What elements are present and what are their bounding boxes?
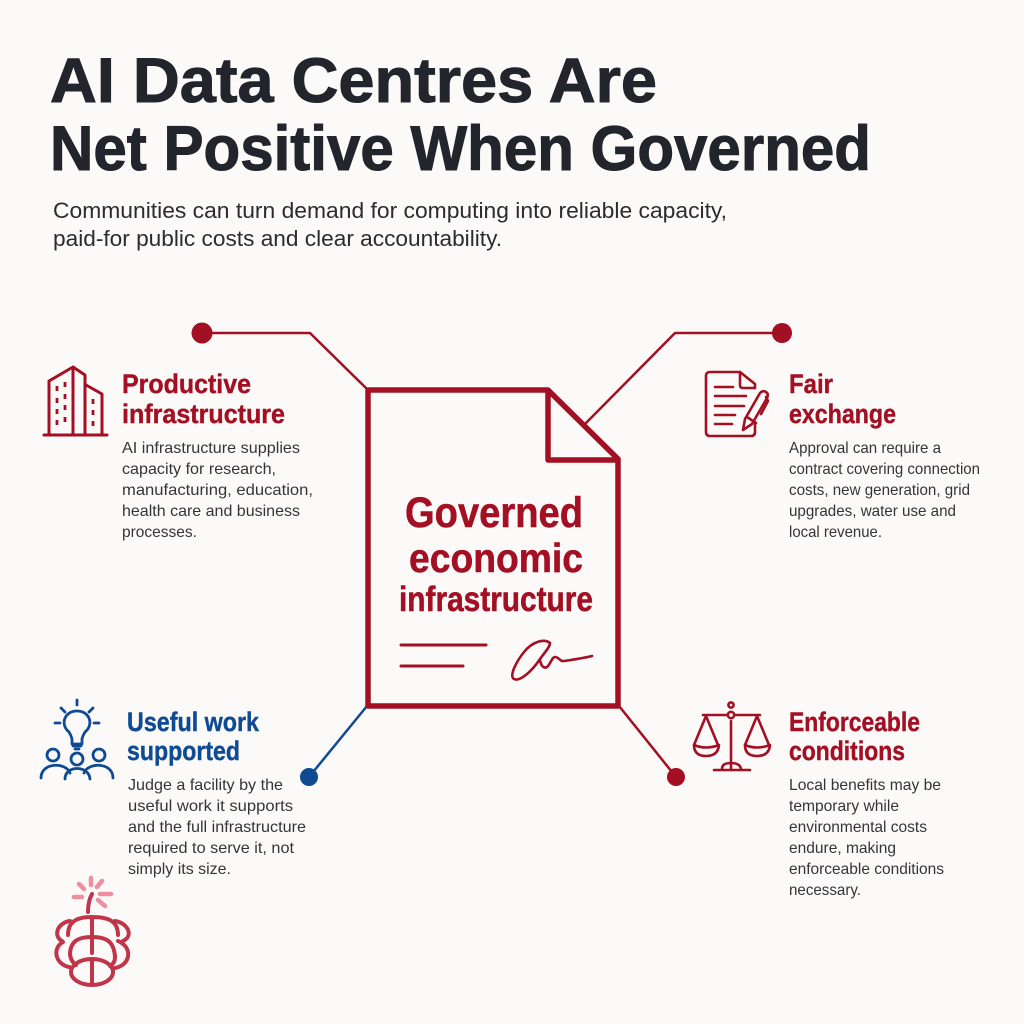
body text: Local benefits may be <box>789 777 941 794</box>
body text: simply its size. <box>128 861 231 878</box>
heading <box>789 707 920 766</box>
body text: Approval can require a <box>789 440 941 457</box>
body text: necessary. <box>789 882 861 899</box>
body text: manufacturing, education, <box>122 482 313 499</box>
heading: conditions <box>789 736 905 766</box>
connector: bottom right <box>619 706 685 786</box>
body text: required to serve it, not <box>128 840 295 857</box>
body text: temporary while <box>789 798 899 815</box>
icon: light bulb and people <box>41 700 113 779</box>
document outline <box>368 390 618 706</box>
body text <box>789 440 980 541</box>
connector: top left <box>192 322 367 389</box>
icon: brain-shaped logo with spark <box>56 878 129 985</box>
body text: endure, making <box>789 840 896 857</box>
icon: contract and pen <box>706 372 768 436</box>
body text: processes. <box>122 524 197 541</box>
heading: Useful work <box>127 707 260 737</box>
document title: economic <box>409 535 583 581</box>
heading: Fair <box>789 369 833 399</box>
body text: useful work it supports <box>128 798 293 815</box>
heading <box>127 707 260 766</box>
title: AI Data Centres Are <box>50 46 657 116</box>
panel: enforceable conditions <box>694 702 944 899</box>
signature lines <box>401 645 486 666</box>
central document <box>368 390 618 706</box>
connector: bottom left <box>300 706 367 786</box>
icon: balance scales <box>694 702 770 770</box>
body text <box>128 777 306 878</box>
body text <box>789 777 944 899</box>
subtitle: paid-for public costs and clear accountability. <box>53 226 502 251</box>
body text: contract covering connection <box>789 461 980 478</box>
heading: Productive <box>122 369 251 399</box>
heading <box>789 369 896 429</box>
document title: infrastructure <box>399 580 593 619</box>
connector: top right <box>585 323 792 424</box>
subtitle <box>53 198 727 251</box>
heading: exchange <box>789 399 896 429</box>
panel: fair exchange <box>706 369 980 541</box>
body text: Judge a facility by the <box>128 777 283 794</box>
body text: capacity for research, <box>122 461 276 478</box>
body text: enforceable conditions <box>789 861 944 878</box>
document title <box>399 489 593 619</box>
heading <box>122 369 285 429</box>
body text: local revenue. <box>789 524 882 541</box>
subtitle: Communities can turn demand for computing into reliable capacity, <box>53 198 727 223</box>
title <box>50 46 871 184</box>
body text: AI infrastructure supplies <box>122 440 300 457</box>
body text: costs, new generation, grid <box>789 482 970 499</box>
heading: infrastructure <box>122 399 285 429</box>
body text: environmental costs <box>789 819 927 836</box>
signature <box>512 641 592 679</box>
panel: useful work supported <box>41 700 306 878</box>
panel: productive infrastructure <box>44 367 313 541</box>
body text <box>122 440 313 541</box>
body text: upgrades, water use and <box>789 503 956 520</box>
heading: Enforceable <box>789 707 920 737</box>
body text: and the full infrastructure <box>128 819 306 836</box>
body text: health care and business <box>122 503 300 520</box>
title: Net Positive When Governed <box>50 114 871 184</box>
heading: supported <box>127 736 240 766</box>
document title: Governed <box>405 489 583 537</box>
icon: office buildings <box>44 367 107 435</box>
